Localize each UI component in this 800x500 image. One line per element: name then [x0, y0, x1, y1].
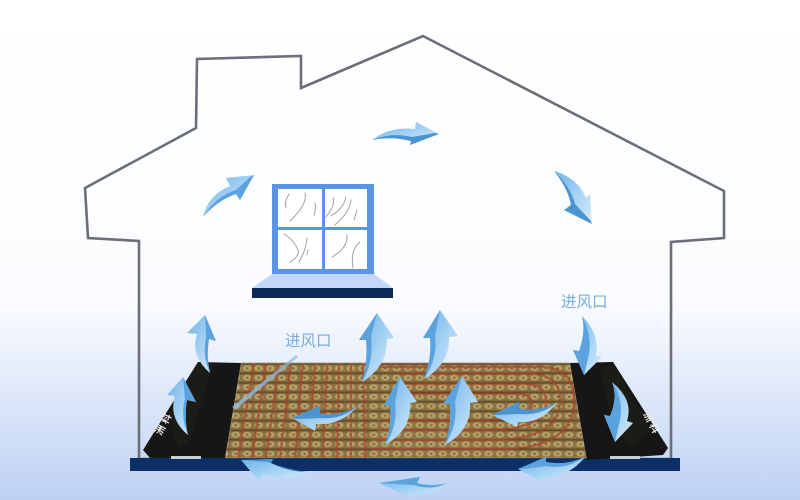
unit brand label: 洲 科: [640, 409, 663, 436]
arrow: floor right outflow: [518, 457, 585, 482]
heating mat: [225, 363, 587, 458]
window cracks: [284, 193, 360, 268]
left heater unit: [143, 362, 241, 459]
arrow: center rising right: [423, 310, 458, 379]
arrow: mat rising 2: [443, 376, 478, 445]
arrow: below floor: [379, 477, 447, 498]
leader line: left air inlet: [232, 355, 298, 409]
right heater unit: [570, 362, 668, 460]
floor bar: [130, 458, 680, 471]
arrow: left rising 1: [187, 315, 216, 373]
arrow: upper left: [203, 175, 254, 217]
arrow: floor left outflow: [241, 459, 308, 481]
window sill: [252, 274, 393, 288]
arrow: right intake: [573, 316, 602, 375]
arrow: ceiling: [372, 122, 439, 145]
arrow: right unit downward: [604, 382, 633, 442]
arrow: center rising left: [359, 313, 394, 382]
arrow: left rising 2: [167, 377, 196, 435]
label: right air inlet: 进风口: [561, 293, 608, 311]
window: [252, 184, 393, 298]
arrow: mat right pointing left: [492, 402, 557, 427]
house outline: [85, 36, 724, 459]
arrow: mat pointing left: [292, 406, 358, 431]
arrow: mat rising 1: [384, 377, 417, 445]
arrow: upper right: [554, 171, 592, 224]
label: left air inlet: 进风口: [285, 332, 332, 350]
unit brand label: 洲 科: [152, 411, 174, 437]
